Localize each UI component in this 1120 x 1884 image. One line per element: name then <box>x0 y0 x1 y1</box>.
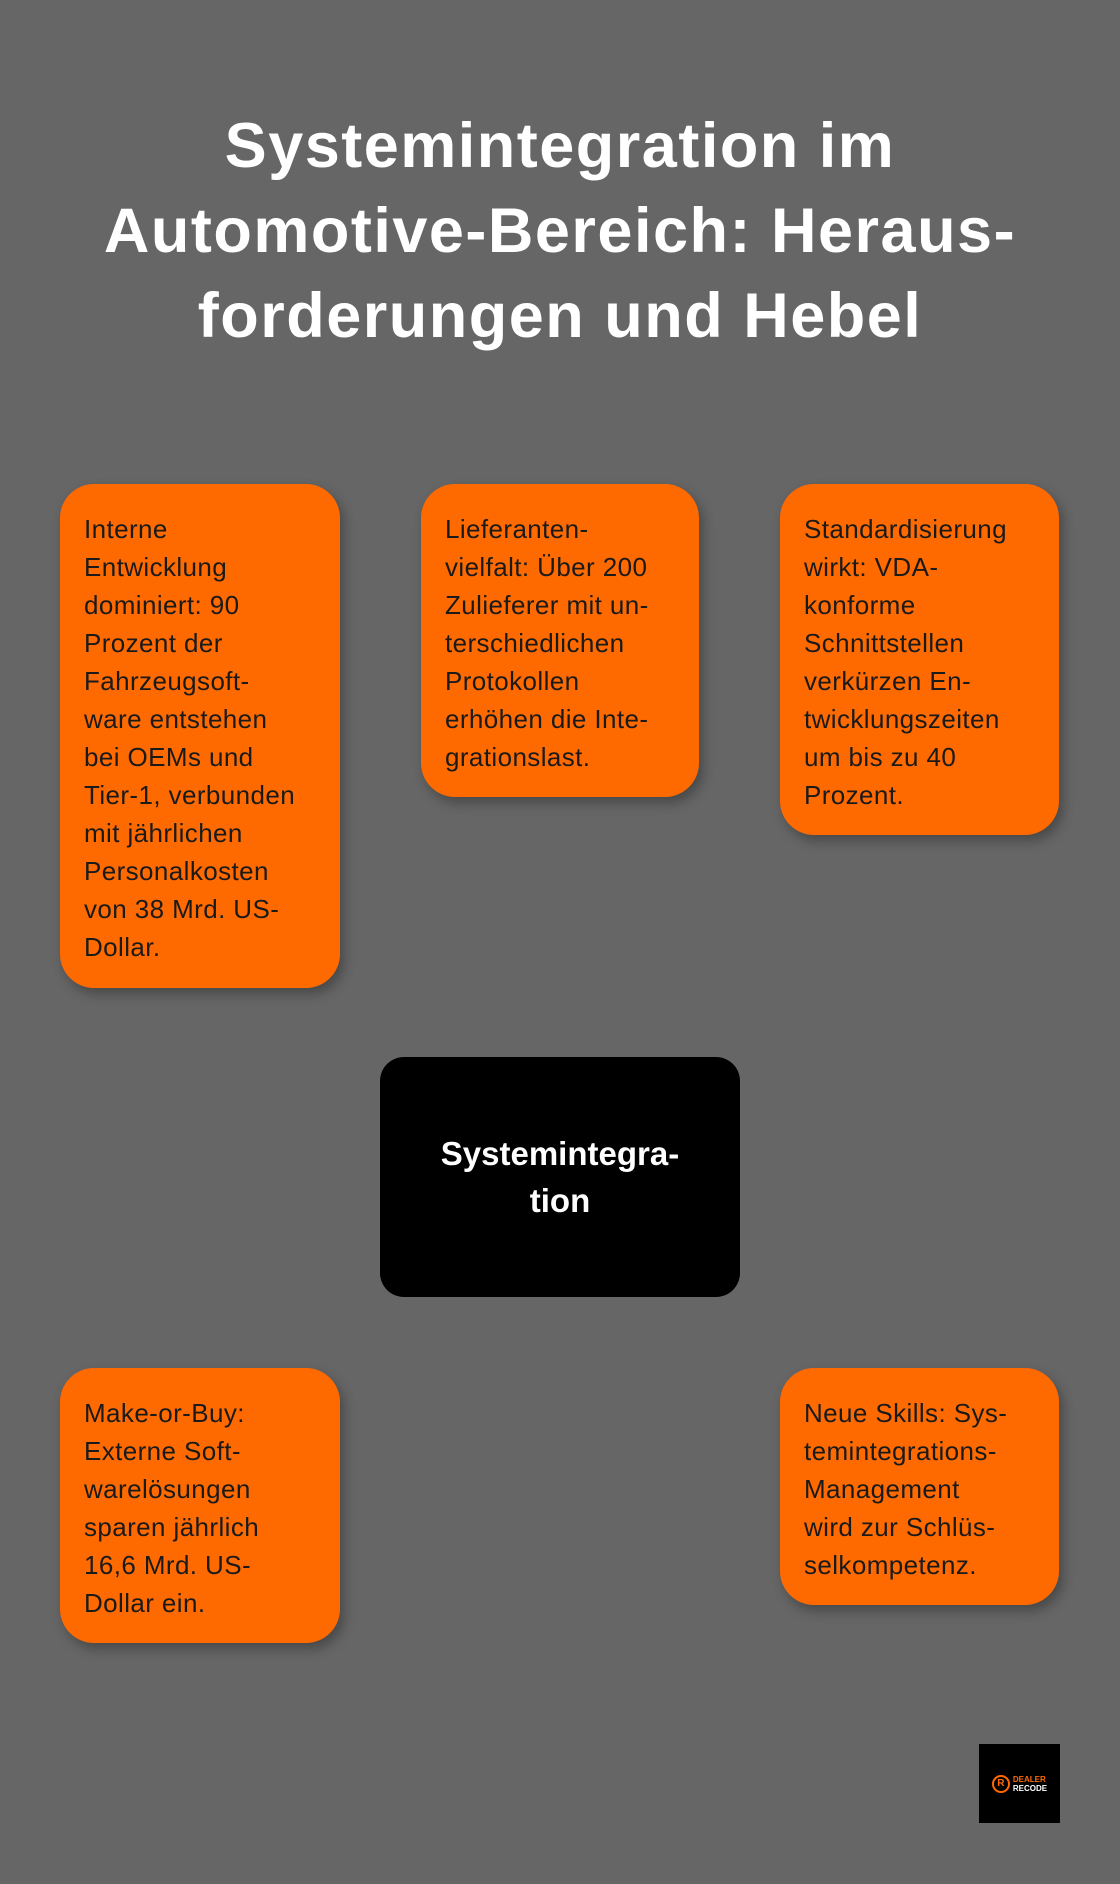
panel: Standardisierung: Schnittstellen <box>804 628 964 658</box>
panel: Standardisierung: konforme <box>804 590 916 620</box>
panel: Lieferantenvielfalt: vielfalt: Über 200 <box>445 552 647 582</box>
panel: interne Entwicklung: Fahrzeugsoft- <box>84 666 250 696</box>
panel: interne Entwicklung: bei OEMs und <box>84 742 254 772</box>
logo: RECODE <box>1013 1784 1047 1792</box>
panel: Standardisierung: verkürzen En- <box>804 666 971 696</box>
panel: interne Entwicklung: von 38 Mrd. US- <box>84 894 279 924</box>
panel: interne Entwicklung: mit jährlichen <box>84 818 243 848</box>
panel: interne Entwicklung: Prozent der <box>84 628 223 658</box>
title: forderungen und Hebel <box>198 281 922 351</box>
panel: Standardisierung: twicklungszeiten <box>804 704 1000 734</box>
panel: Neue Skills: wird zur Schlüs- <box>804 1512 995 1542</box>
panel: Lieferantenvielfalt: erhöhen die Inte- <box>445 704 648 734</box>
panel: interne Entwicklung: dominiert: 90 <box>84 590 240 620</box>
panel: Lieferantenvielfalt: terschiedlichen <box>445 628 624 658</box>
panel: Standardisierung: wirkt: VDA- <box>804 552 938 582</box>
panel: Standardisierung: Standardisierung <box>804 514 1007 544</box>
logo: DEALER <box>1013 1774 1046 1784</box>
panel: Neue Skills: Management <box>804 1474 960 1504</box>
panel: Neue Skills <box>780 1368 1059 1605</box>
panel: Standardisierung <box>780 484 1059 835</box>
panel: Neue Skills: Neue Skills: Sys- <box>804 1398 1007 1428</box>
panel: Make-or-Buy: 16,6 Mrd. US- <box>84 1550 251 1580</box>
panel: Make-or-Buy: sparen jährlich <box>84 1512 259 1542</box>
panel: Lieferantenvielfalt: Protokollen <box>445 666 579 696</box>
title <box>104 111 1016 351</box>
logo: R <box>997 1778 1004 1788</box>
panel: Lieferantenvielfalt <box>421 484 699 797</box>
panel: Neue Skills: selkompetenz. <box>804 1550 977 1580</box>
logo <box>979 1744 1060 1823</box>
panel: Make-or-Buy: Dollar ein. <box>84 1588 205 1618</box>
panel: Lieferantenvielfalt: Lieferanten- <box>445 514 589 544</box>
panel: Neue Skills: temintegrations- <box>804 1436 997 1466</box>
panel: Standardisierung: Prozent. <box>804 780 904 810</box>
panel: interne Entwicklung: Interne <box>84 514 168 544</box>
panel: interne Entwicklung: ware entstehen <box>84 704 267 734</box>
panel: interne Entwicklung: Tier-1, verbunden <box>84 780 295 810</box>
panel: Standardisierung: um bis zu 40 <box>804 742 956 772</box>
panel: Make-or-Buy: Externe Soft- <box>84 1436 241 1466</box>
title: Automotive-Bereich: Heraus- <box>104 196 1016 266</box>
center node: Systemintegra- <box>441 1135 679 1172</box>
panel: interne Entwicklung: Dollar. <box>84 932 160 962</box>
panel: Lieferantenvielfalt: grationslast. <box>445 742 590 772</box>
center node: tion <box>530 1182 590 1219</box>
panel: interne Entwicklung: Entwicklung <box>84 552 227 582</box>
panel: Make-or-Buy: warelösungen <box>84 1474 251 1504</box>
panel: interne Entwicklung <box>60 484 340 988</box>
panel: Make-or-Buy <box>60 1368 340 1643</box>
title: Systemintegration im <box>225 111 895 181</box>
panel: interne Entwicklung: Personalkosten <box>84 856 269 886</box>
center node <box>380 1057 740 1297</box>
panel: Make-or-Buy: Make-or-Buy: <box>84 1398 245 1428</box>
panel: Lieferantenvielfalt: Zulieferer mit un- <box>445 590 649 620</box>
